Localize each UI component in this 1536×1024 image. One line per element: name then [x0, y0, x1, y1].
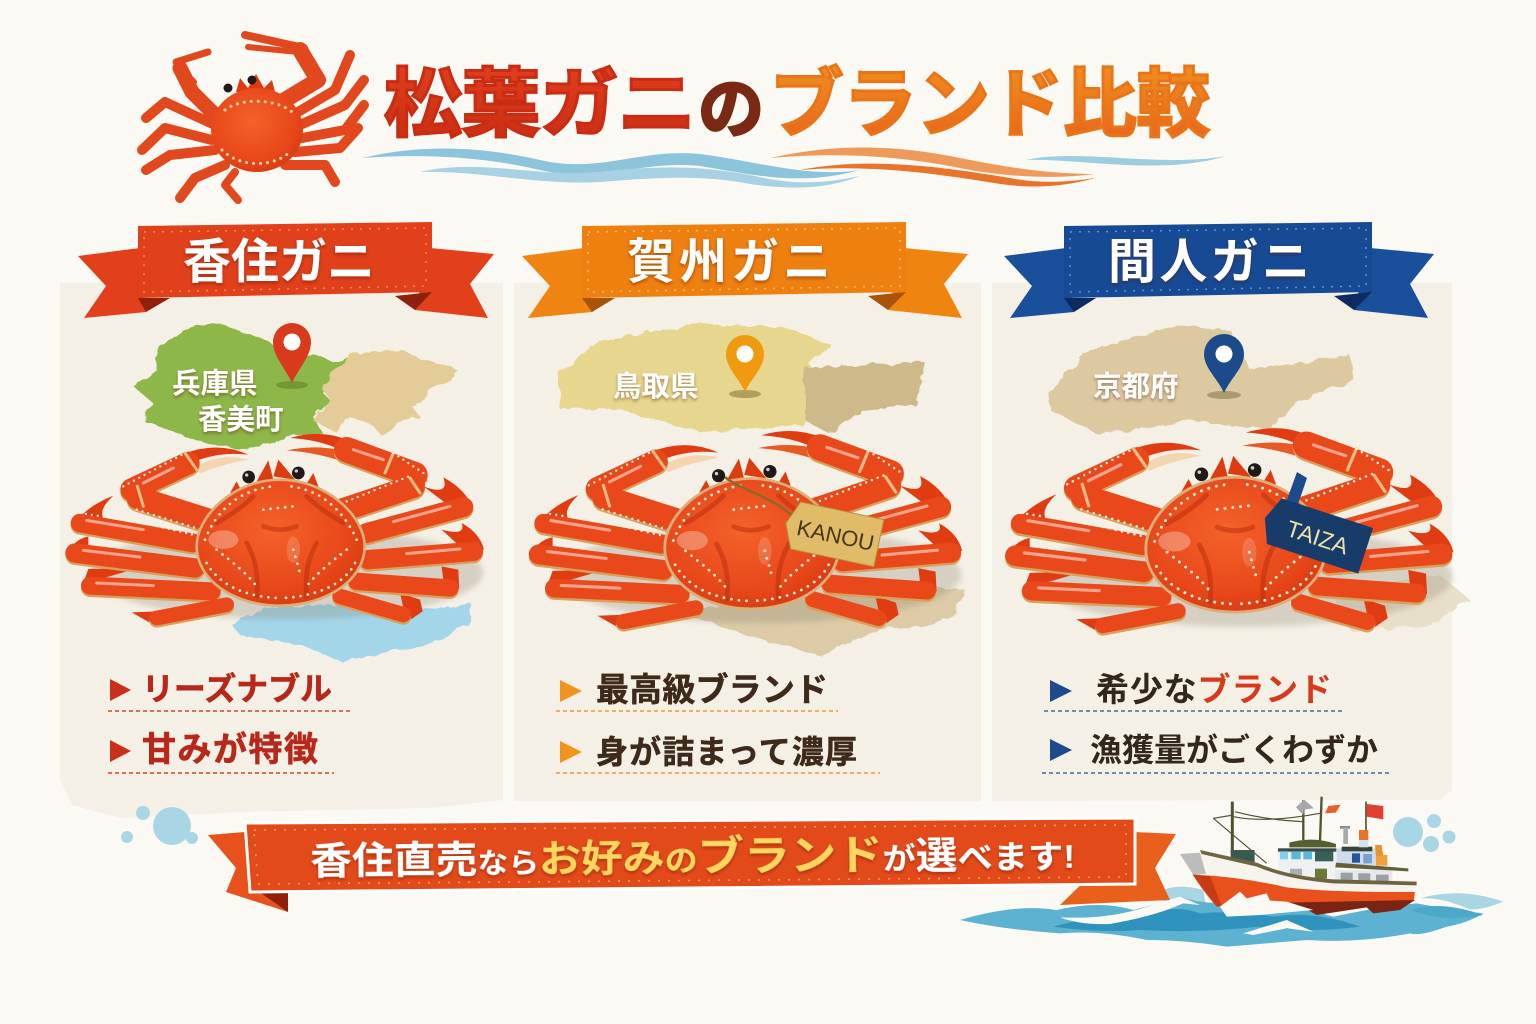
map label: 兵庫県	[172, 368, 258, 400]
map label: 京都府	[1093, 371, 1179, 403]
map label: 香美町	[198, 404, 284, 436]
map: 鳥取県 and neighbour	[560, 325, 925, 435]
hull	[1180, 853, 1416, 907]
panel: 賀州ガニ	[514, 283, 981, 801]
sea blot	[232, 604, 472, 660]
cabin	[1278, 848, 1336, 878]
panel: 間人ガニ	[992, 283, 1470, 801]
ribbon: 賀州ガニ: 賀州ガニ	[627, 236, 831, 289]
title crab icon	[142, 35, 364, 200]
banner	[208, 818, 1176, 912]
title: 松葉ガニ	[384, 62, 696, 146]
map pin	[273, 323, 311, 389]
panel background	[992, 283, 1452, 801]
title: の	[698, 72, 764, 146]
title	[384, 62, 1210, 146]
ribbon: 香住ガニ	[78, 222, 494, 318]
masts and rigging	[1213, 797, 1366, 863]
ribbon: 間人ガニ	[1004, 222, 1434, 318]
panel background	[60, 283, 503, 818]
crab	[1007, 428, 1453, 632]
bubbles: left	[121, 806, 198, 845]
feature: 甘みが特徴	[108, 730, 334, 773]
banner body	[245, 818, 1135, 892]
crab	[67, 434, 484, 625]
tag: KANOU: KANOU	[795, 515, 876, 556]
tag: KANOU	[725, 477, 884, 567]
banner tails	[208, 832, 288, 912]
ribbon: 香住ガニ: 香住ガニ	[183, 236, 375, 289]
banner text: 香住直売 ならお好み のブランド が選べます!	[310, 830, 1075, 883]
map: 兵庫県 and neighbour	[135, 322, 455, 450]
feature: 最高級ブランド: 最高級ブランド	[596, 671, 828, 708]
crab	[530, 431, 962, 629]
map: 京都府	[1048, 325, 1355, 435]
land blot	[1330, 575, 1470, 630]
sea waves	[960, 887, 1503, 947]
map pin	[1204, 334, 1244, 399]
map label	[172, 368, 284, 436]
ribbon: 賀州ガニ	[522, 222, 968, 318]
feature: 漁獲量がごくわずか: 漁獲量がごくわずか	[1090, 732, 1378, 768]
tag: TAIZA: TAIZA	[1283, 515, 1352, 560]
bow spray	[1220, 892, 1313, 917]
bubbles: right	[1393, 814, 1456, 852]
tag: TAIZA	[1257, 472, 1373, 574]
map label: 鳥取県	[613, 371, 699, 403]
panel: 香住ガニ	[60, 283, 503, 818]
ribbon: 間人ガニ: 間人ガニ	[1108, 236, 1310, 289]
map pin	[726, 335, 764, 398]
title waves	[362, 147, 1226, 188]
fishing boat	[1180, 797, 1417, 917]
land blot	[680, 585, 965, 655]
flags	[1296, 799, 1314, 815]
feature: 身が詰まって濃厚: 身が詰まって濃厚	[596, 734, 857, 770]
feature: 希少なブランド: 希少なブランド	[1096, 671, 1332, 708]
feature: 甘みが特徴: 甘みが特徴	[142, 730, 318, 769]
panel background	[514, 283, 981, 801]
feature: リーズナブル: リーズナブル	[142, 671, 332, 707]
title: ブランド比較	[770, 62, 1210, 146]
